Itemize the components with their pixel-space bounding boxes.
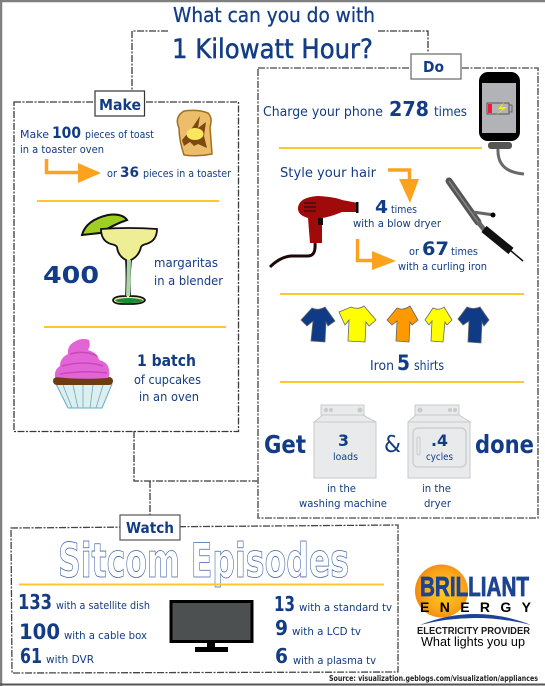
arrow: to curling iron bbox=[358, 239, 396, 270]
phone text: Charge your phone bbox=[263, 105, 383, 120]
cupcake text bbox=[134, 351, 201, 404]
ampersand: & bbox=[384, 432, 401, 458]
iron text: Iron bbox=[370, 359, 394, 374]
left list: 100 bbox=[19, 620, 60, 644]
icons: shirts bbox=[301, 306, 489, 343]
logo: brilliant energy: What lights you up bbox=[421, 635, 525, 649]
icon: curling iron bbox=[449, 181, 523, 261]
margaritas text: margaritas bbox=[154, 256, 218, 270]
icon: dryer: .4 bbox=[431, 431, 448, 450]
toast text: in a toaster oven bbox=[20, 143, 104, 156]
icon: hair dryer bbox=[270, 196, 358, 267]
title bbox=[172, 3, 375, 65]
make label: Make bbox=[99, 96, 141, 114]
margaritas number: 400 bbox=[43, 263, 99, 289]
right list: with a LCD tv bbox=[292, 625, 361, 638]
curling iron text: 67 bbox=[422, 238, 449, 260]
icon: washing machine bbox=[314, 405, 376, 478]
washer caption: in the bbox=[327, 482, 356, 495]
washer caption bbox=[299, 482, 387, 510]
curling iron text: times bbox=[451, 245, 478, 258]
toaster text: 36 bbox=[120, 165, 139, 181]
curling iron text: with a curling iron bbox=[398, 260, 487, 273]
left list: with DVR bbox=[46, 653, 94, 666]
toaster text bbox=[107, 165, 231, 181]
icon: tv bbox=[171, 602, 252, 652]
logo: brilliant energy: ELECTRICITY PROVIDER bbox=[417, 625, 530, 637]
do label bbox=[411, 54, 461, 79]
phone text: times bbox=[434, 105, 467, 120]
dryer caption bbox=[422, 482, 451, 510]
title: What can you do with bbox=[173, 3, 375, 27]
iron text: shirts bbox=[414, 359, 444, 374]
left list: with a cable box bbox=[64, 629, 147, 642]
arrow: to toaster bbox=[46, 159, 101, 183]
blow dryer text: with a blow dryer bbox=[353, 217, 441, 230]
left list: 133 bbox=[18, 590, 52, 614]
phone text bbox=[263, 97, 467, 121]
icon: phone bbox=[479, 72, 524, 174]
icon: toast bbox=[177, 110, 212, 156]
arrow: to blow dryer bbox=[388, 170, 419, 203]
logo: brilliant energy: ENERGY bbox=[420, 599, 532, 615]
left list bbox=[18, 590, 150, 668]
washer caption: washing machine bbox=[299, 497, 387, 510]
icon: dryer bbox=[408, 405, 470, 478]
watch label bbox=[120, 515, 180, 540]
title: 1 Kilowatt Hour? bbox=[172, 34, 373, 65]
icon: washing machine: loads bbox=[333, 452, 358, 463]
blow dryer text: times bbox=[391, 203, 417, 216]
phone text: 278 bbox=[389, 97, 429, 121]
iron text: 5 bbox=[397, 351, 410, 375]
curling iron text: or bbox=[409, 245, 419, 258]
right list: 6 bbox=[275, 644, 288, 668]
margaritas text: in a blender bbox=[154, 274, 223, 288]
toast text: Make bbox=[20, 128, 49, 141]
curling iron text bbox=[398, 238, 487, 273]
panel: watch bbox=[11, 515, 398, 673]
icon: dryer: cycles bbox=[426, 452, 453, 463]
panel: do bbox=[258, 54, 538, 518]
toaster text: or bbox=[107, 167, 117, 180]
icon: margarita bbox=[82, 215, 157, 304]
get text: Get bbox=[264, 430, 306, 459]
left list: 61 bbox=[20, 644, 42, 668]
toast text: pieces of toast bbox=[85, 128, 155, 141]
blow dryer text: 4 bbox=[375, 197, 388, 218]
watch label: Watch bbox=[126, 519, 174, 537]
done text: done bbox=[475, 430, 534, 459]
cupcake text: in an oven bbox=[139, 390, 199, 404]
right list: with a plasma tv bbox=[293, 654, 376, 667]
toast text bbox=[20, 123, 155, 156]
icon: cupcake bbox=[53, 339, 113, 408]
panel: make bbox=[14, 91, 238, 432]
right list: 9 bbox=[275, 616, 288, 640]
blow dryer text bbox=[353, 197, 441, 230]
right list: with a standard tv bbox=[299, 601, 392, 614]
hair heading: Style your hair bbox=[280, 166, 377, 181]
cupcake text: of cupcakes bbox=[134, 373, 201, 387]
logo: brilliant energy bbox=[415, 564, 532, 649]
toast text: 100 bbox=[52, 123, 81, 142]
left list: with a satellite dish bbox=[56, 599, 150, 612]
toaster text: pieces in a toaster bbox=[143, 167, 231, 180]
iron text bbox=[370, 351, 444, 375]
margaritas text bbox=[154, 256, 223, 288]
sitcom heading: Sitcom Episodes bbox=[58, 534, 349, 589]
make label bbox=[95, 91, 144, 116]
dryer caption: dryer bbox=[424, 497, 451, 510]
right list: 13 bbox=[274, 592, 295, 616]
right list bbox=[274, 592, 392, 668]
cupcake text: 1 batch bbox=[137, 351, 196, 370]
do label: Do bbox=[423, 58, 444, 76]
icon: washing machine: 3 bbox=[338, 431, 349, 450]
dryer caption: in the bbox=[422, 482, 451, 495]
